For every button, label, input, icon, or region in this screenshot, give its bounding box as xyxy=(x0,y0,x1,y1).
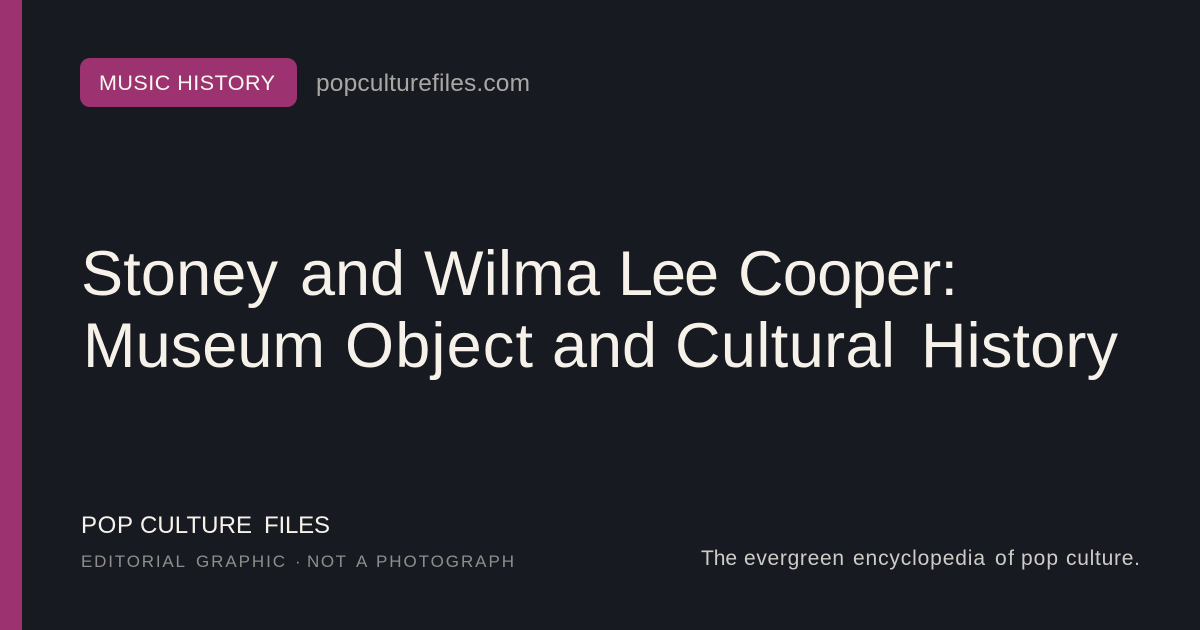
title: History xyxy=(921,311,1118,381)
title: Cooper: xyxy=(738,239,958,309)
title xyxy=(81,239,1118,381)
brand name xyxy=(81,512,330,539)
disclaimer: PHOTOGRAPH xyxy=(376,552,514,571)
title: and xyxy=(552,311,657,381)
brand name: FILES xyxy=(264,512,330,539)
tagline: pop xyxy=(1021,547,1058,570)
tagline: culture. xyxy=(1066,547,1140,570)
disclaimer: EDITORIAL xyxy=(81,552,185,571)
site domain: popculturefiles.com xyxy=(316,70,530,97)
disclaimer: NOT xyxy=(307,552,346,571)
tagline: of xyxy=(995,547,1014,570)
category pill xyxy=(80,58,297,107)
category pill: MUSIC HISTORY xyxy=(99,71,275,95)
tagline: The xyxy=(701,547,737,570)
title: Lee xyxy=(618,239,719,309)
accent bar xyxy=(0,0,22,630)
brand name: POP xyxy=(81,512,133,539)
tagline xyxy=(701,547,1140,570)
disclaimer xyxy=(81,552,514,571)
title: Wilma xyxy=(424,239,601,309)
disclaimer: A xyxy=(356,552,368,571)
disclaimer: · xyxy=(295,552,301,571)
disclaimer: GRAPHIC xyxy=(196,552,285,571)
brand name: CULTURE xyxy=(140,512,252,539)
title: Cultural xyxy=(675,311,895,381)
title: Object xyxy=(345,311,533,381)
tagline: encyclopedia xyxy=(853,547,985,570)
title: Stoney xyxy=(81,239,278,309)
title: Museum xyxy=(83,311,325,381)
tagline: evergreen xyxy=(744,547,844,570)
title: and xyxy=(300,239,405,309)
